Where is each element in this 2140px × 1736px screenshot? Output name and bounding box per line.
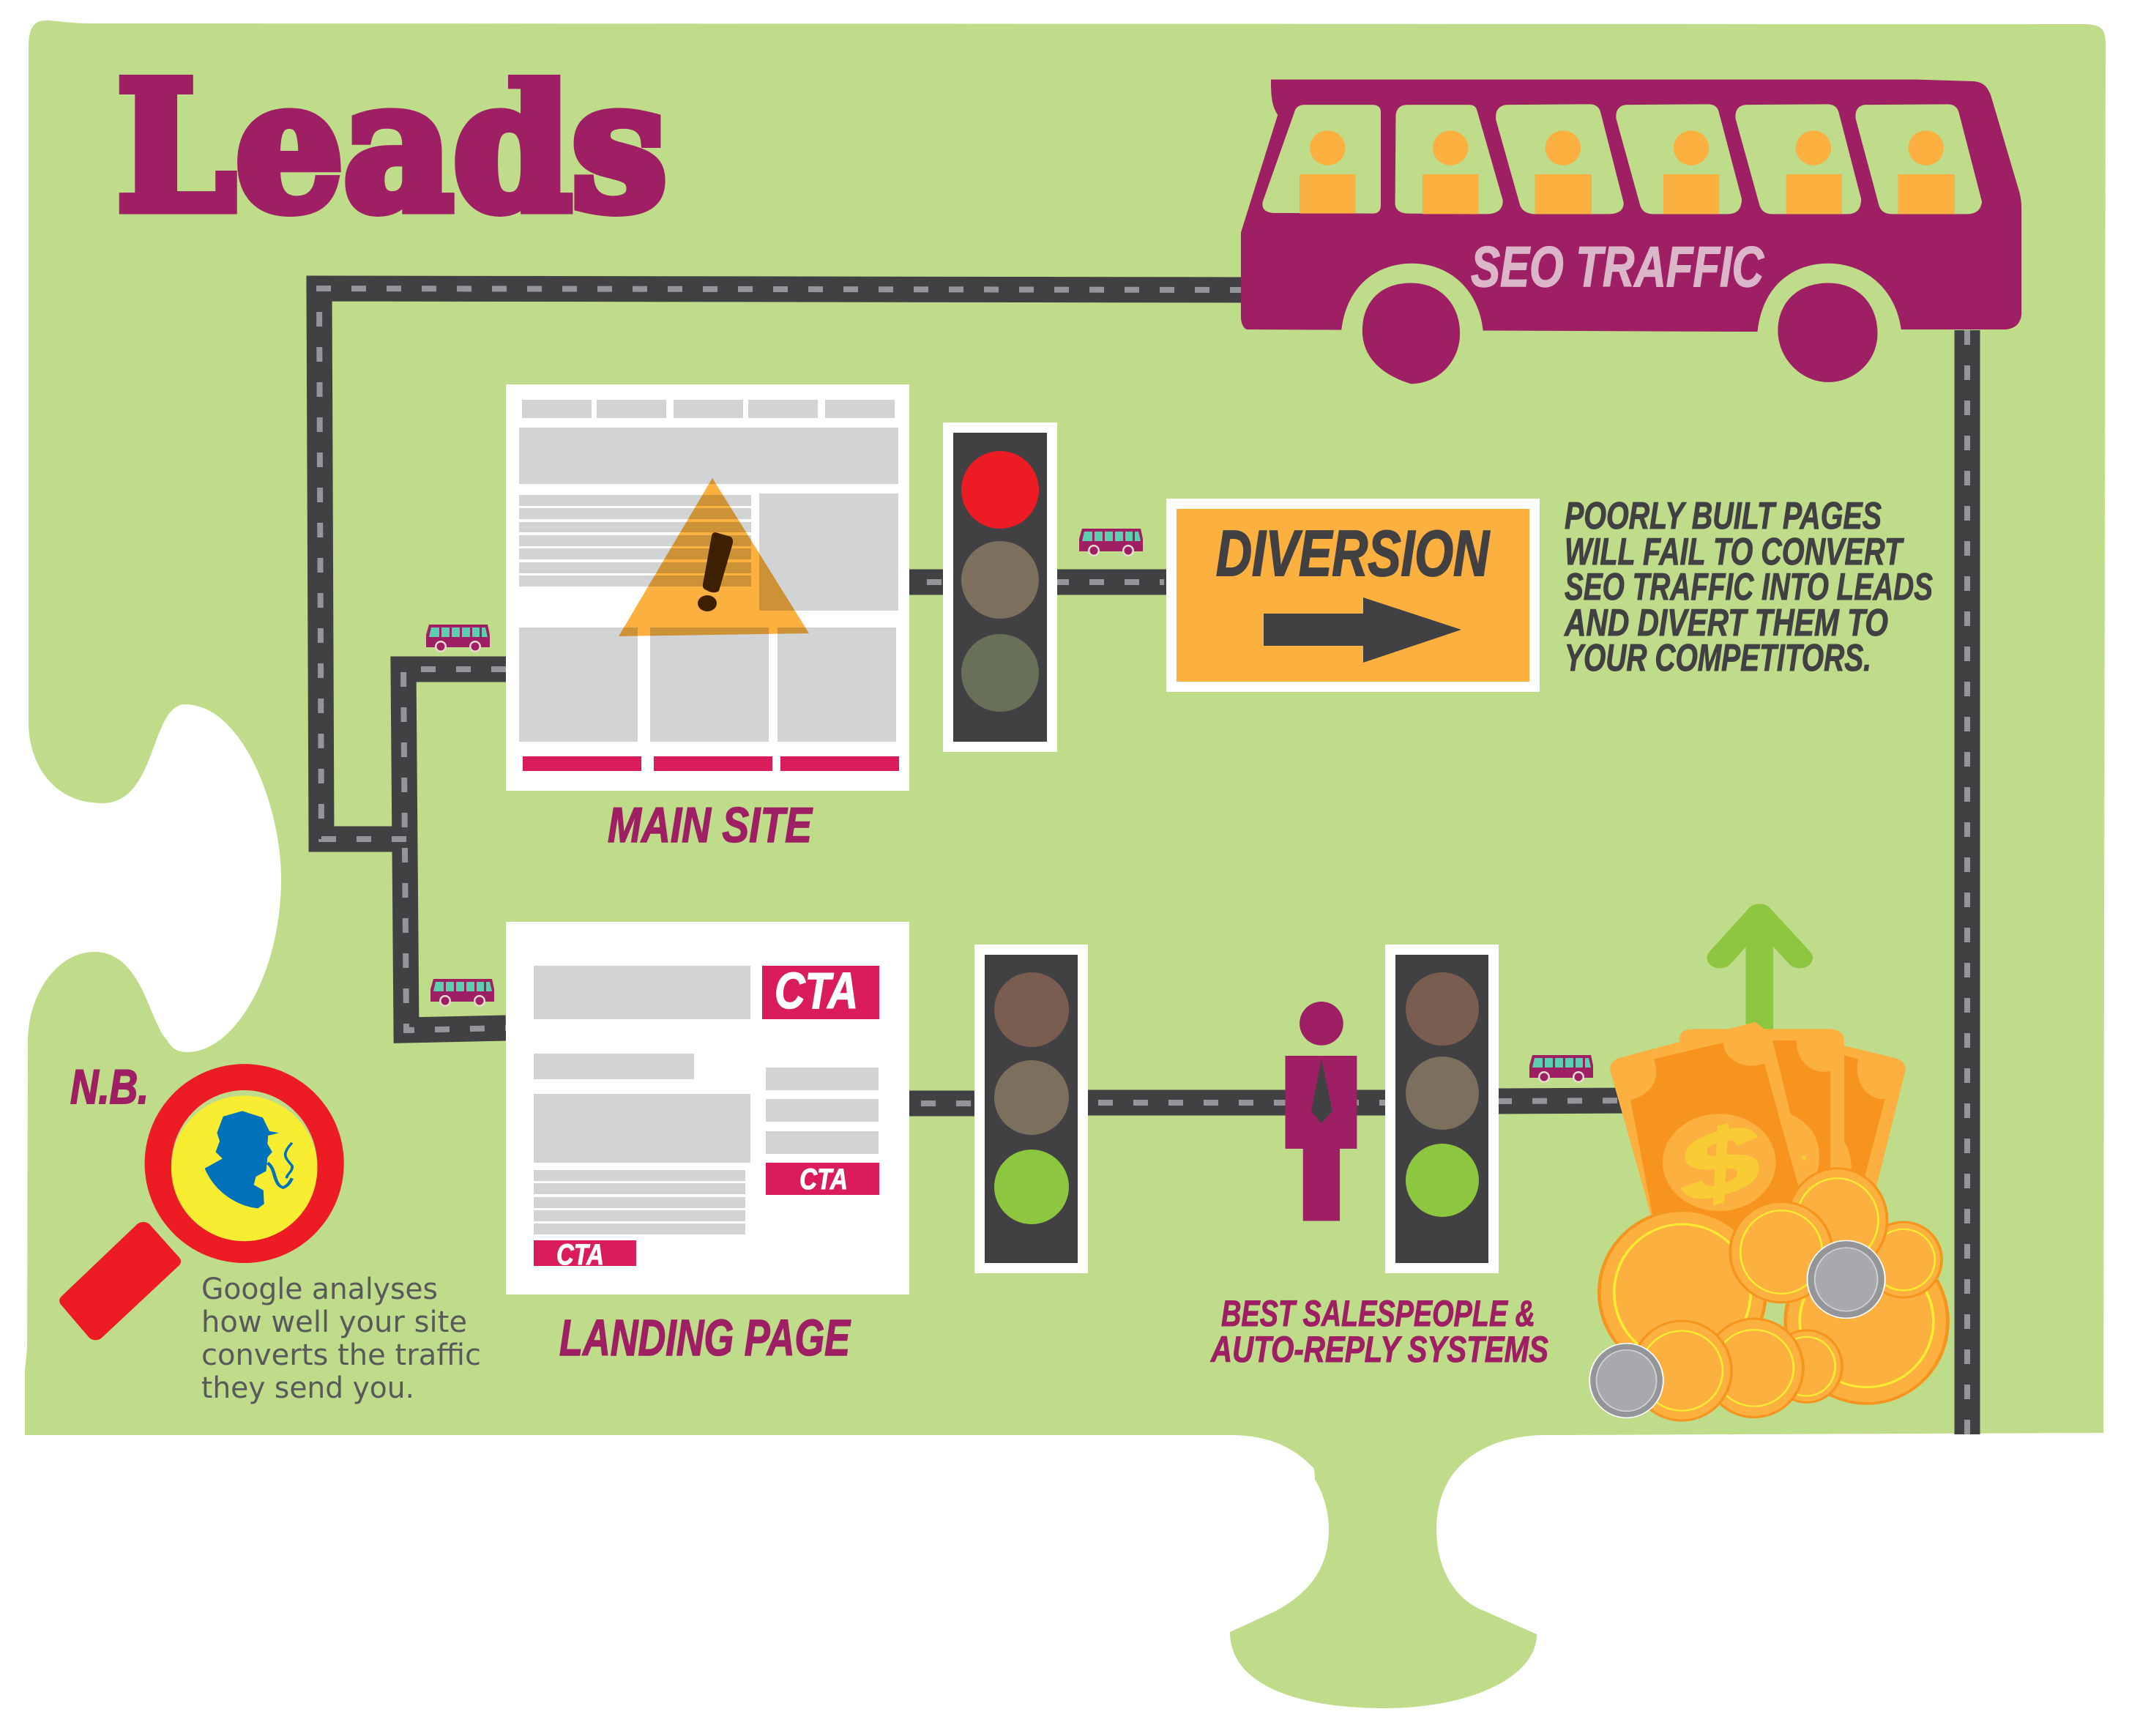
coin bottom right <box>1771 1330 1842 1402</box>
small bus near money <box>1529 1055 1593 1083</box>
bus passengers <box>1300 130 1955 214</box>
coin bottom left <box>1632 1321 1731 1420</box>
label: main site: MAIN SITE <box>608 797 813 853</box>
label: N.B.: N.B. <box>70 1059 149 1114</box>
CTA medium <box>766 1163 879 1196</box>
salesperson figure <box>1286 1002 1357 1221</box>
diversion arrow <box>1264 597 1461 663</box>
text block: google analyses: Google analyses <box>201 1273 438 1306</box>
road network <box>319 288 1967 1434</box>
small bus near landing page <box>430 979 494 1007</box>
dollar sign: $ <box>1667 1104 1772 1223</box>
detective silhouette <box>205 1111 292 1208</box>
label: best salespeople <box>1209 1293 1548 1370</box>
coin middle <box>1730 1202 1833 1303</box>
text block: poorly built pages: YOUR COMPETITORS. <box>1565 637 1871 679</box>
money pile: bills and coins <box>1589 1022 1947 1420</box>
magnifier lens <box>145 1064 344 1263</box>
coin large left <box>1599 1210 1766 1374</box>
title: Leads <box>116 41 667 251</box>
warning triangle icon <box>619 478 809 636</box>
small bus near diversion <box>1079 529 1143 556</box>
back bill <box>1820 1040 1906 1218</box>
coin small right <box>1865 1222 1942 1297</box>
bus body <box>1241 80 2021 332</box>
bus windows <box>1262 104 1982 214</box>
diversion sign <box>1171 504 1535 687</box>
text block: poorly built pages: WILL FAIL TO CONVERT <box>1565 531 1904 573</box>
coin large right <box>1786 1240 1947 1404</box>
front bill <box>1610 1022 1820 1240</box>
silver coin upper <box>1807 1240 1885 1318</box>
growth arrow <box>1720 914 1800 1043</box>
label: best salespeople: BEST SALESPEOPLE & <box>1221 1293 1535 1334</box>
text block: poorly built pages: SEO TRAFFIC INTO LEADS <box>1565 566 1933 608</box>
text block: google analyses: how well your site <box>201 1305 467 1339</box>
label: landing page: LANDING PAGE <box>559 1309 851 1366</box>
text block: poorly built pages: POORLY BUILT PAGES <box>1565 495 1882 537</box>
diversion text: DIVERSION <box>1216 517 1491 589</box>
middle bill <box>1679 1029 1844 1229</box>
CTA large: CTA <box>775 962 858 1019</box>
middle bill: . <box>1799 1136 1808 1166</box>
CTA small: CTA <box>556 1239 604 1271</box>
panel: main site page <box>506 384 909 791</box>
icon: magnifier with detective <box>67 1064 344 1333</box>
big bus: SEO traffic <box>1241 80 2021 384</box>
text block: google analyses <box>201 1273 481 1405</box>
CTA small <box>534 1239 636 1271</box>
traffic light: green 2 <box>1390 950 1494 1268</box>
label: best salespeople: AUTO-REPLY SYSTEMS <box>1209 1329 1548 1370</box>
coin bottom middle <box>1705 1319 1803 1418</box>
small bus near main site <box>426 625 490 652</box>
text block: google analyses: they send you. <box>201 1371 414 1405</box>
text block: google analyses: converts the traffic <box>201 1338 481 1372</box>
coin upper <box>1787 1169 1887 1273</box>
panel: landing page <box>506 922 909 1294</box>
silver coin lower <box>1589 1344 1663 1418</box>
traffic light: red <box>948 428 1052 747</box>
magnifier handle <box>67 1229 173 1333</box>
bus label: SEO TRAFFIC <box>1471 234 1764 299</box>
traffic light: green 1 <box>980 950 1083 1268</box>
bus wheels <box>1341 264 1901 384</box>
CTA medium: CTA <box>799 1163 848 1196</box>
text block: poorly built pages <box>1563 495 1933 679</box>
text block: poorly built pages: AND DIVERT THEM TO <box>1563 602 1888 644</box>
